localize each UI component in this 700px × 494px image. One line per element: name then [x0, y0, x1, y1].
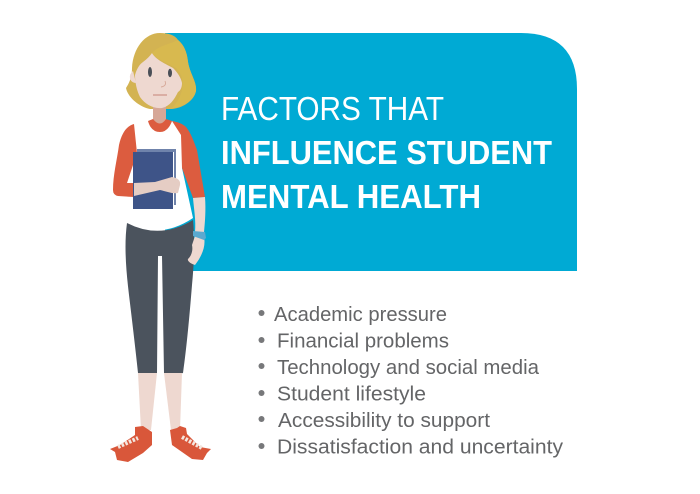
legs — [138, 373, 157, 430]
right laces — [182, 437, 202, 448]
hair fringe — [152, 40, 196, 108]
right hand — [188, 236, 205, 265]
item: student lifestyle: Student lifestyle — [277, 384, 426, 406]
hair — [126, 33, 196, 109]
right arm — [193, 197, 205, 232]
item: accessibility to support: Accessibility to support — [278, 410, 490, 432]
list: factors — [258, 304, 563, 458]
heading: title: INFLUENCE STUDENT — [221, 134, 552, 171]
leggings — [126, 220, 194, 374]
face — [135, 53, 182, 108]
heading: title: FACTORS THAT — [221, 90, 444, 127]
book — [137, 149, 176, 205]
panel: blue title banner — [165, 33, 577, 271]
heading: title: MENTAL HEALTH — [221, 178, 481, 215]
left shoe — [110, 426, 152, 462]
white body backing — [125, 121, 193, 230]
item: dissatisfaction and uncertainty: Dissatisfaction and uncertainty — [277, 436, 563, 458]
wristband — [193, 231, 206, 240]
nose — [161, 81, 166, 87]
figure: student holding a book — [110, 33, 211, 462]
forearm and hand on book — [134, 177, 180, 196]
item: financial problems: Financial problems — [277, 330, 449, 352]
item: academic pressure: Academic pressure — [274, 304, 447, 326]
mouth — [153, 94, 167, 96]
collar — [148, 119, 172, 132]
heading: title — [221, 90, 552, 215]
right shoe — [170, 426, 211, 460]
right sleeve — [172, 121, 205, 198]
left laces — [118, 438, 138, 447]
left sleeve — [113, 124, 137, 197]
neck — [153, 103, 166, 127]
eyes — [148, 67, 152, 77]
ear — [130, 71, 136, 83]
item: technology and social media: Technology and social media — [277, 357, 540, 379]
